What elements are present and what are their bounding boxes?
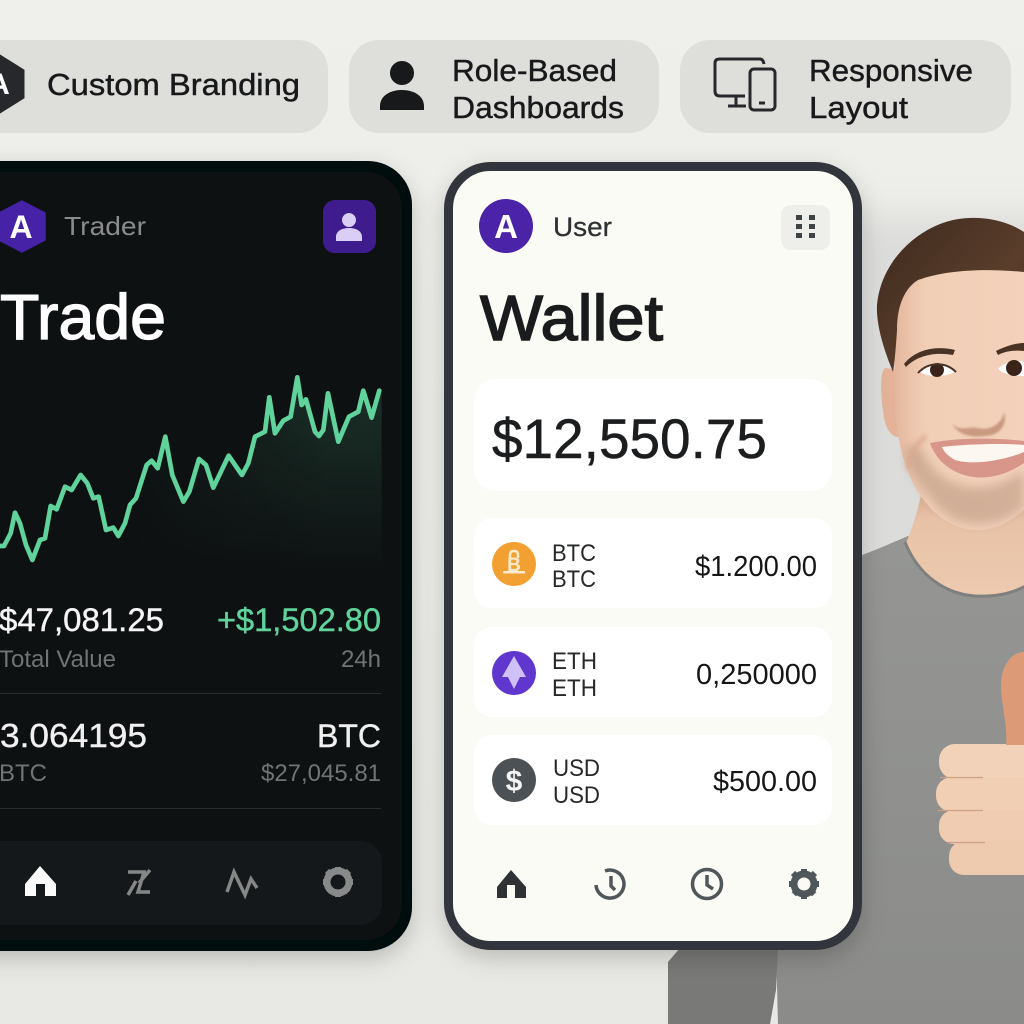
mouth — [930, 439, 1024, 477]
bottom navigation — [497, 869, 819, 899]
feature pill: role-based dashboards — [349, 40, 659, 133]
label: Dashboards — [452, 90, 624, 125]
hair — [877, 218, 1024, 372]
role label: User — [553, 212, 612, 242]
ear — [881, 368, 900, 437]
BTC amount stat: 3.064195 — [0, 717, 147, 754]
neck — [905, 480, 1024, 595]
total value stat — [0, 602, 164, 673]
icon: dollar: $ — [506, 765, 523, 798]
icon: user logo — [479, 199, 533, 253]
icon: user — [380, 61, 424, 110]
backdrop behind person — [850, 215, 1024, 635]
right eye — [998, 360, 1024, 376]
asset row: USD: USD — [553, 782, 600, 809]
BTC amount stat — [0, 717, 147, 787]
label — [452, 53, 624, 125]
asset row: ETH — [474, 627, 832, 717]
asset row: BTC: BTC — [552, 540, 596, 567]
panel: light user phone — [448, 166, 858, 946]
hand fingers — [936, 744, 1024, 875]
nose shadow — [952, 412, 1005, 436]
face — [893, 260, 1024, 530]
label: Layout — [809, 90, 908, 125]
asset row: BTC: BTC — [552, 566, 596, 593]
icon: activity — [227, 872, 257, 895]
bottom navigation — [0, 841, 382, 925]
collar — [905, 542, 1024, 596]
person photo: smiling man giving thumbs up — [668, 215, 1024, 1024]
total value stat: $47,081.25 — [0, 602, 164, 638]
24h change stat: +$1,502.80 — [217, 602, 381, 638]
icon: settings — [323, 867, 353, 897]
icon: brand hexagon — [0, 55, 24, 113]
asset row: ETH: ETH — [552, 675, 597, 702]
icon: home — [497, 870, 526, 898]
asset row: USD: USD — [553, 755, 600, 782]
line chart — [0, 377, 382, 573]
total value stat: Total Value — [0, 646, 116, 673]
left eye — [918, 363, 956, 377]
icon: history — [596, 870, 624, 898]
icon: trader logo hexagon: A — [9, 209, 33, 245]
feature pill: custom branding — [0, 40, 328, 133]
label — [809, 53, 973, 125]
label: Responsive — [809, 53, 973, 88]
chart line — [0, 377, 379, 560]
right brow — [996, 343, 1024, 355]
24h change stat: 24h — [341, 646, 381, 673]
balance card: $12,550.75 — [492, 407, 767, 470]
icon: grid menu — [781, 205, 830, 250]
icon: transfer — [128, 870, 150, 895]
icon: user logo: A — [494, 208, 518, 245]
asset row: ETH: ETH — [552, 648, 597, 675]
icon: ethereum — [492, 651, 536, 695]
icon: clock — [692, 870, 722, 898]
sleeve below phone — [668, 948, 778, 1024]
icon: bitcoin: B — [507, 555, 521, 576]
asset row: BTC — [474, 518, 832, 608]
24h change stat — [217, 602, 381, 673]
feature pill: responsive layout — [680, 40, 1011, 133]
BTC value stat: $27,045.81 — [261, 760, 381, 787]
heading: Wallet — [480, 282, 663, 354]
asset row: USD: $500.00 — [713, 766, 817, 798]
smile crease — [908, 436, 926, 470]
BTC value stat: BTC — [317, 718, 381, 754]
icon: monitor and phone — [715, 59, 775, 110]
left brow — [904, 348, 955, 367]
label: Role-Based — [452, 53, 617, 88]
icon: settings — [789, 869, 819, 899]
icon: bitcoin — [492, 542, 536, 586]
asset row: BTC: $1.200.00 — [695, 551, 817, 583]
icon: home — [25, 866, 56, 896]
asset row: USD — [474, 735, 832, 825]
role label: Trader — [64, 211, 146, 241]
BTC value stat — [261, 718, 381, 787]
icon: trader logo hexagon — [0, 201, 45, 252]
heading: Trade — [0, 281, 166, 353]
sweater — [776, 536, 1024, 1024]
stubble — [905, 447, 1024, 524]
BTC amount stat: BTC — [0, 760, 47, 787]
label: Custom Branding — [47, 67, 300, 102]
teeth — [942, 444, 1024, 462]
thumb — [1001, 652, 1024, 745]
icon: profile badge — [323, 200, 376, 253]
chart area fill — [224, 392, 382, 524]
asset row: ETH: 0,250000 — [696, 659, 817, 691]
balance card — [474, 379, 832, 491]
icon: dollar — [492, 758, 536, 802]
panel: dark trader phone — [0, 161, 412, 951]
